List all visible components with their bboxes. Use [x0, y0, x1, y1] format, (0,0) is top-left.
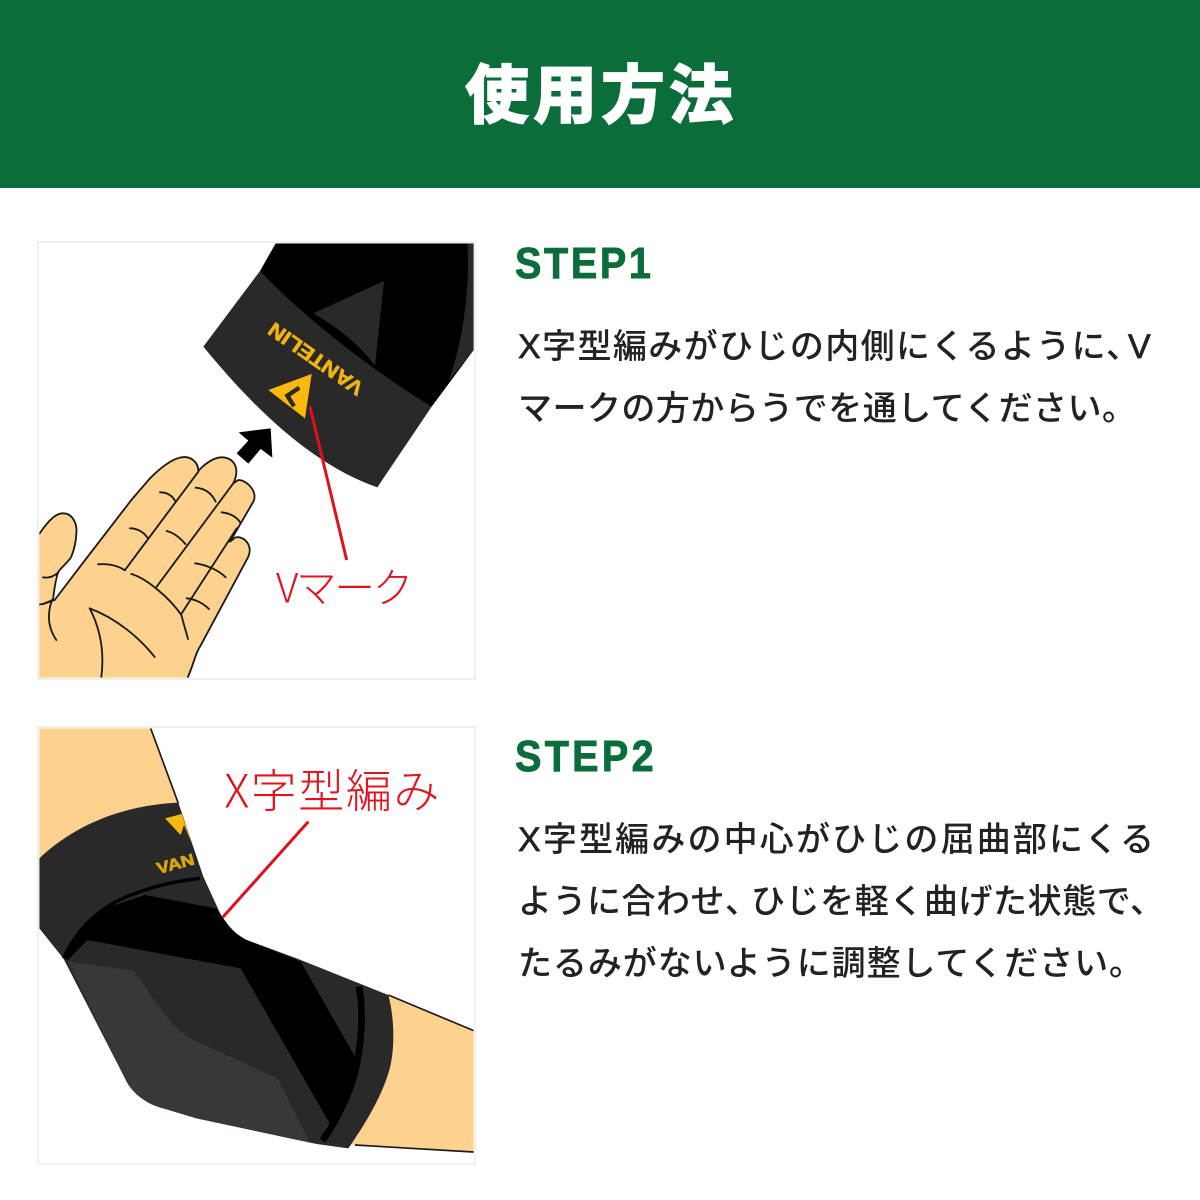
step 1 body: マークの方からうでを通してください。 [518, 390, 1136, 428]
label: X weave: X字型編み [224, 755, 439, 821]
step 2 body: ように合わせ、 [518, 883, 759, 921]
sleeve opening [203, 243, 474, 487]
brand text: VANTELIN [265, 317, 368, 399]
step 1 text [515, 238, 1151, 428]
panel: step 2 illustration [38, 727, 475, 1164]
step 2 body: X字型編みの中心がひじの屈曲部にくる [518, 821, 1154, 859]
step 1 body: X字型編みがひじの内側にくるように、 [518, 328, 1140, 366]
step 2 body: たるみがないように調整してください。 [518, 945, 1143, 983]
step 2 body: ひじを軽く曲げた状態で、 [751, 883, 1164, 921]
step 1 heading: STEP1 [515, 238, 651, 287]
upper arm [39, 728, 178, 870]
side panel [68, 962, 310, 1143]
icon: V mark [268, 374, 312, 418]
header banner [0, 0, 1200, 188]
arrow [237, 428, 272, 464]
forearm [350, 993, 474, 1152]
arm outlines [151, 728, 474, 1152]
brand text: VAN [155, 852, 196, 878]
X weave [65, 895, 358, 1124]
label: V mark: Vマーク [276, 556, 413, 615]
elbow sleeve [39, 803, 393, 1148]
step 1 body [518, 328, 1151, 428]
hand [33, 457, 255, 685]
step 2 text [515, 731, 1164, 983]
seam right [323, 987, 362, 1141]
cuff seam [63, 878, 200, 958]
red leader line [310, 407, 347, 560]
step 1 body: V [1128, 328, 1151, 366]
panel: step 1 illustration [33, 242, 475, 685]
title: 使用方法 [465, 60, 733, 132]
red leader line [223, 822, 308, 917]
step 2 body [518, 821, 1164, 983]
icon: V mark [165, 814, 192, 843]
step 2 heading: STEP2 [515, 731, 654, 780]
